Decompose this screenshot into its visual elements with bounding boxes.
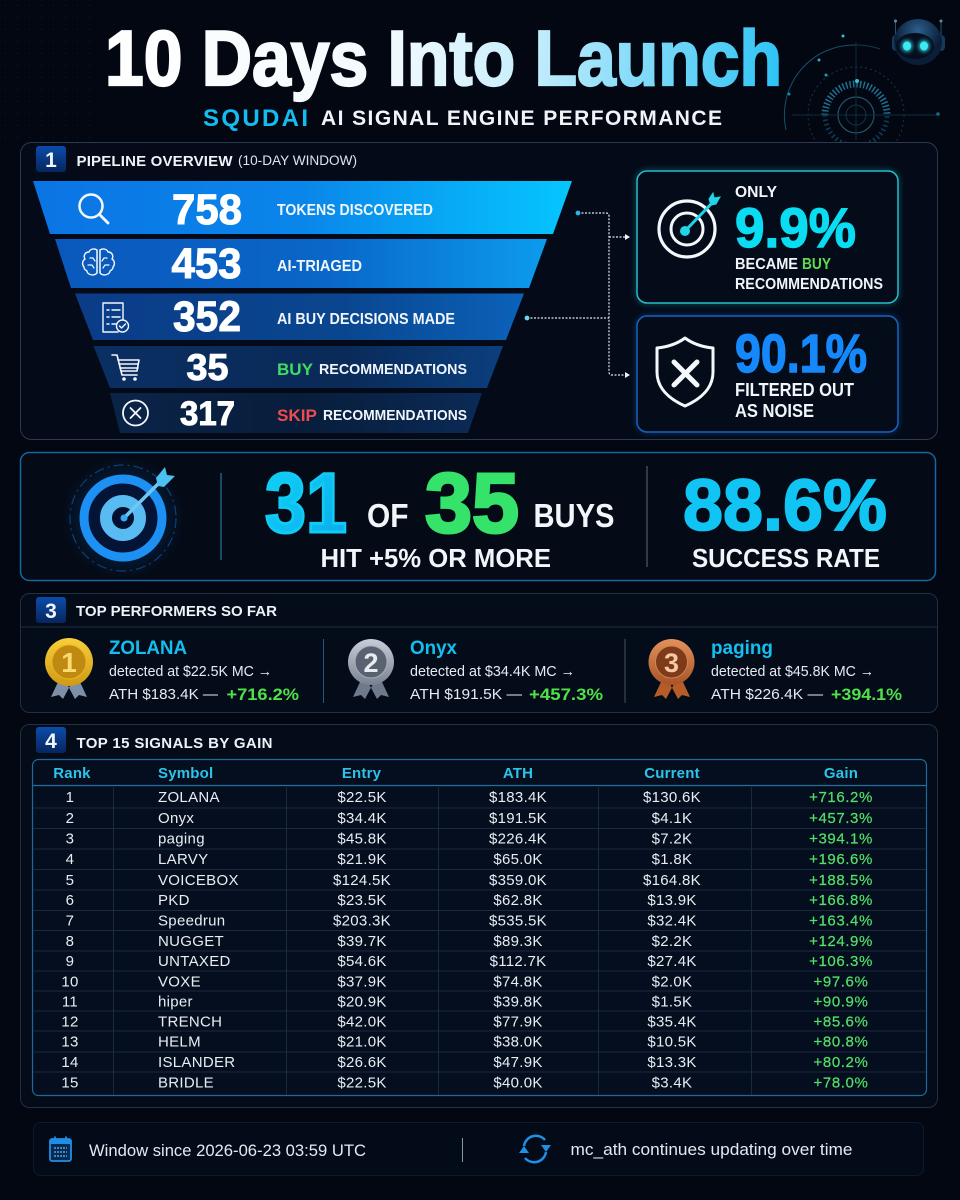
performer 2: Onyx: ATH $191.5K — xyxy=(410,686,522,703)
table row 14: $26.6K xyxy=(337,1054,387,1071)
table row 14: ISLANDER xyxy=(158,1054,235,1071)
subtitle xyxy=(203,105,722,132)
stat: 88.6% success rate: SUCCESS RATE xyxy=(692,543,880,573)
table row 7: +163.4% xyxy=(809,912,873,930)
table row 7: $535.5K xyxy=(489,912,547,930)
table row 9 xyxy=(66,953,873,970)
table row 5: $164.8K xyxy=(643,872,701,889)
table row 1: $183.4K xyxy=(489,789,547,806)
table row 10: $37.9K xyxy=(337,974,387,990)
table row 12: +85.6% xyxy=(814,1014,868,1030)
section badge 4: 4 xyxy=(45,730,57,753)
table row 9: $54.6K xyxy=(337,953,387,970)
table row 8: NUGGET xyxy=(158,933,224,950)
table row 14: +80.2% xyxy=(814,1054,868,1071)
panel: top 15 signals xyxy=(20,724,938,1108)
table row 6: $23.5K xyxy=(337,892,387,909)
funnel row: buy recommendations: RECOMMENDATIONS xyxy=(319,361,467,378)
table row 2: $34.4K xyxy=(337,810,387,827)
table row 15: 15 xyxy=(61,1074,79,1092)
table row 11: $20.9K xyxy=(337,994,387,1010)
stat: 31 of 35 buys xyxy=(265,456,614,573)
funnel row: tokens discovered: TOKENS DISCOVERED xyxy=(277,202,433,219)
table row 14 xyxy=(61,1054,868,1071)
callout: 90.1% filtered xyxy=(637,316,898,432)
table row 6 xyxy=(66,892,873,909)
table row 11: +90.9% xyxy=(814,994,868,1010)
table row 2: $191.5K xyxy=(489,810,547,827)
table row 15: $3.4K xyxy=(652,1074,692,1092)
icon: silver medal: 2 xyxy=(363,648,379,678)
table row 2: Onyx xyxy=(158,810,194,827)
table row 3: $7.2K xyxy=(652,830,692,848)
table row 15: BRIDLE xyxy=(158,1074,214,1092)
heading: top 15 signals: TOP 15 SIGNALS BY GAIN xyxy=(76,735,272,752)
footer note: window: Window since 2026-06-23 03:59 UTC xyxy=(89,1142,366,1160)
table row 10: 10 xyxy=(61,974,79,990)
table header xyxy=(53,765,858,782)
table row 13: $10.5K xyxy=(647,1034,697,1050)
table row 13 xyxy=(61,1034,868,1050)
table row 8 xyxy=(66,933,873,950)
table row 7: $32.4K xyxy=(647,912,697,930)
table row 1: $130.6K xyxy=(643,789,701,806)
table row 8: +124.9% xyxy=(809,933,873,950)
performer 3: paging: paging xyxy=(711,638,773,659)
performer 2: Onyx: Onyx xyxy=(410,638,457,659)
table row 5 xyxy=(66,872,873,889)
table row 5: VOICEBOX xyxy=(158,872,239,889)
table row 6: PKD xyxy=(158,892,190,909)
icon: glowing target xyxy=(61,456,185,580)
table row 15: $22.5K xyxy=(337,1074,387,1092)
table row 3: 3 xyxy=(66,830,74,848)
funnel row: buy recommendations: 35 xyxy=(186,347,228,388)
section badge 3: 3 xyxy=(45,600,57,623)
callout: 90.1% filtered: AS NOISE xyxy=(735,401,814,421)
table row 13: 13 xyxy=(61,1034,79,1050)
table row 9: 9 xyxy=(66,953,74,970)
table row 5: 5 xyxy=(66,872,74,889)
table row 4: LARVY xyxy=(158,851,208,868)
performer 3: paging: +394.1% xyxy=(831,685,902,704)
performer 2: Onyx: detected at $34.4K MC → xyxy=(410,663,575,680)
table row 4: 4 xyxy=(66,851,74,868)
icon: bronze medal xyxy=(648,639,694,699)
table row 12: $77.9K xyxy=(493,1014,543,1030)
table row 4: $1.8K xyxy=(652,851,692,868)
funnel row: tokens discovered xyxy=(33,181,572,234)
callout: 90.1% filtered: 90.1% xyxy=(735,324,867,384)
table header: Symbol xyxy=(158,765,213,782)
funnel row: buy recommendations: BUY xyxy=(277,360,314,379)
funnel row: skip recommendations xyxy=(110,393,482,433)
icon: bronze medal: 3 xyxy=(664,648,679,678)
panel: success hero xyxy=(20,452,936,580)
table row 10 xyxy=(61,974,868,990)
funnel row: buy recommendations xyxy=(94,346,503,388)
table row 2: $4.1K xyxy=(652,810,692,827)
callout: only 9.9%: RECOMMENDATIONS xyxy=(735,276,883,293)
table row 2: 2 xyxy=(66,810,74,827)
heading: pipeline overview: PIPELINE OVERVIEW xyxy=(76,153,233,170)
table header: Gain xyxy=(824,765,858,782)
funnel row: skip recommendations: SKIP xyxy=(277,406,317,425)
footer note: mc_ath: mc_ath continues updating over time xyxy=(570,1141,852,1159)
performer 1: ZOLANA: +716.2% xyxy=(226,685,299,704)
table row 3: $226.4K xyxy=(489,830,547,848)
table header: Current xyxy=(644,765,700,782)
performer 2: Onyx xyxy=(348,638,603,704)
funnel row: AI-triaged xyxy=(55,239,547,288)
performer 2: Onyx: +457.3% xyxy=(529,685,603,704)
table row 13: HELM xyxy=(158,1034,201,1050)
stat: 31 of 35 buys: 35 xyxy=(425,456,519,550)
table row 8: $39.7K xyxy=(337,933,387,950)
stat: 31 of 35 buys: OF xyxy=(367,497,408,534)
table row 2 xyxy=(66,810,873,827)
table row 1: ZOLANA xyxy=(158,789,220,806)
table row 6: +166.8% xyxy=(809,892,873,909)
table row 3: paging xyxy=(158,830,205,848)
performer 3: paging: detected at $45.8K MC → xyxy=(711,663,874,680)
performer 3: paging: ATH $226.4K — xyxy=(711,686,823,703)
table row 2: +457.3% xyxy=(809,810,873,827)
funnel row: AI buy decisions: 352 xyxy=(173,293,241,341)
table row 5: $359.0K xyxy=(489,872,547,889)
panel: pipeline overview xyxy=(20,142,938,440)
footer bar xyxy=(34,1122,924,1176)
performer 1: ZOLANA: ZOLANA xyxy=(109,638,187,659)
title: 10 Days Into Launch xyxy=(105,14,782,102)
table row 6: 6 xyxy=(66,892,74,909)
performer 1: ZOLANA xyxy=(45,638,299,704)
table row 12: 12 xyxy=(61,1014,79,1030)
icon: calendar xyxy=(50,1136,71,1161)
table row 6: $62.8K xyxy=(493,892,543,909)
funnel row: AI buy decisions xyxy=(75,293,524,341)
callout: only 9.9%: BECAME xyxy=(735,256,798,273)
table row 11: 11 xyxy=(62,994,78,1010)
table row 14: $47.9K xyxy=(493,1054,543,1071)
table row 11: $1.5K xyxy=(652,994,692,1010)
table row 4: $65.0K xyxy=(493,851,543,868)
icon: gold medal: 1 xyxy=(61,647,77,678)
heading: pipeline overview: (10-DAY WINDOW) xyxy=(238,153,357,168)
table row 14: 14 xyxy=(61,1054,79,1071)
performer 1: ZOLANA: detected at $22.5K MC → xyxy=(109,663,272,680)
section badge 4 xyxy=(36,727,66,753)
table row 9: +106.3% xyxy=(809,953,873,970)
callout: 90.1% filtered: FILTERED OUT xyxy=(735,380,854,400)
table row 6: $13.9K xyxy=(647,892,697,909)
stat: 31 of 35 buys: BUYS xyxy=(534,497,614,534)
icon: refresh arrows xyxy=(519,1136,551,1162)
funnel row: AI-triaged: AI-TRIAGED xyxy=(277,258,362,275)
table row 11 xyxy=(62,994,868,1010)
funnel row: AI buy decisions: AI BUY DECISIONS MADE xyxy=(277,311,455,328)
table row 3: $45.8K xyxy=(337,830,387,848)
funnel row: skip recommendations: RECOMMENDATIONS xyxy=(323,407,467,424)
table row 4: +196.6% xyxy=(809,851,873,868)
table row 5: +188.5% xyxy=(809,872,873,889)
icon: target xyxy=(659,193,720,257)
subtitle: SQUDAI xyxy=(203,105,308,132)
table row 1: 1 xyxy=(66,789,74,806)
section badge 3 xyxy=(36,597,66,623)
table row 12: TRENCH xyxy=(158,1014,222,1030)
section badge 1 xyxy=(36,146,66,172)
table row 1: $22.5K xyxy=(337,789,387,806)
icon: silver medal xyxy=(348,639,394,699)
table row 1: +716.2% xyxy=(809,789,873,806)
table row 15 xyxy=(61,1074,868,1092)
arrows: funnel to callouts xyxy=(525,211,630,378)
table header: Rank xyxy=(53,765,91,782)
icon: shield with X xyxy=(657,338,713,406)
table row 3 xyxy=(66,830,873,848)
heading: pipeline overview xyxy=(76,153,357,170)
table row 4: $21.9K xyxy=(337,851,387,868)
table row 9: $112.7K xyxy=(490,953,546,970)
table row 13: +80.8% xyxy=(814,1034,868,1050)
table row 3: +394.1% xyxy=(809,830,873,848)
table row 7: Speedrun xyxy=(158,912,225,930)
table row 13: $21.0K xyxy=(337,1034,387,1050)
table header: Entry xyxy=(342,765,382,782)
table row 15: $40.0K xyxy=(493,1074,543,1092)
callout: only 9.9%: BUY xyxy=(802,256,832,273)
table: signals xyxy=(32,760,926,1096)
funnel row: tokens discovered: 758 xyxy=(172,186,242,234)
table row 5: $124.5K xyxy=(333,872,391,889)
funnel row: AI-triaged: 453 xyxy=(172,240,242,288)
funnel chart xyxy=(33,181,572,433)
table header: ATH xyxy=(503,765,533,782)
table row 7: $203.3K xyxy=(333,912,391,930)
heading: top performers: TOP PERFORMERS SO FAR xyxy=(76,603,277,620)
table row 12: $42.0K xyxy=(337,1014,387,1030)
table row 10: VOXE xyxy=(158,974,201,990)
table row 7: 7 xyxy=(66,912,74,930)
table row 14: $13.3K xyxy=(647,1054,697,1071)
performer 1: ZOLANA: ATH $183.4K — xyxy=(109,686,218,703)
table row 15: +78.0% xyxy=(814,1074,868,1092)
icon: gold medal xyxy=(45,638,93,699)
table row 1 xyxy=(66,789,873,806)
stat: 88.6% success rate: 88.6% xyxy=(683,466,887,546)
table row 9: UNTAXED xyxy=(158,953,231,970)
callout: only 9.9%: 9.9% xyxy=(735,196,856,259)
callout: only 9.9%: ONLY xyxy=(735,184,777,201)
table row 10: $74.8K xyxy=(493,974,543,990)
icon: robot mascot xyxy=(892,19,945,65)
table row 13: $38.0K xyxy=(493,1034,543,1050)
table row 12: $35.4K xyxy=(647,1014,697,1030)
stat: 31 of 35 buys: 31 xyxy=(265,456,347,550)
table row 12 xyxy=(61,1014,868,1030)
table row 10: +97.6% xyxy=(814,974,868,990)
table row 11: $39.8K xyxy=(493,994,543,1010)
table row 8: 8 xyxy=(66,933,74,950)
subtitle: AI SIGNAL ENGINE PERFORMANCE xyxy=(321,107,722,130)
panel: top performers xyxy=(20,594,938,712)
section badge 1: 1 xyxy=(45,149,57,172)
table row 7 xyxy=(66,912,873,930)
performer 3: paging xyxy=(648,638,902,704)
callout: only 9.9% xyxy=(637,171,898,303)
table row 10: $2.0K xyxy=(652,974,692,990)
table row 8: $2.2K xyxy=(652,933,692,950)
table row 4 xyxy=(66,851,873,868)
stat: 31 of 35 buys: HIT +5% OR MORE xyxy=(320,543,551,573)
decoration: HUD circles xyxy=(784,34,940,163)
table row 8: $89.3K xyxy=(493,933,543,950)
table row 9: $27.4K xyxy=(647,953,697,970)
table row 11: hiper xyxy=(158,994,193,1010)
funnel row: skip recommendations: 317 xyxy=(180,395,235,433)
